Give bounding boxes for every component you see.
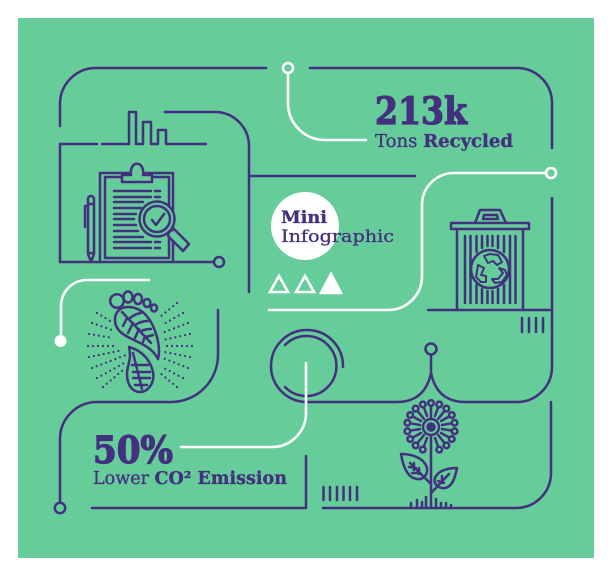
white line: 213k connector <box>283 63 366 140</box>
white line: foot connector <box>54 280 149 347</box>
icon: recycling bin <box>428 210 552 310</box>
bin lid <box>451 210 529 229</box>
stat label: Lower CO² Emission <box>93 469 287 489</box>
icon: flower <box>401 400 457 508</box>
right leaf <box>432 468 457 492</box>
white connector lines <box>54 63 556 447</box>
clipboard board <box>100 173 173 262</box>
ticks: bottom <box>324 487 357 500</box>
title: Mini Infographic <box>271 192 394 260</box>
line: top right frame <box>310 68 552 148</box>
icon: factory skyline line <box>60 112 206 262</box>
triangles <box>270 274 341 293</box>
line: left bracket with branch <box>165 112 415 292</box>
connector lines and line art <box>55 68 552 513</box>
magnifier <box>140 202 189 251</box>
floor line <box>428 309 552 311</box>
clipboard text lines <box>114 191 160 248</box>
flower head <box>405 400 457 452</box>
flower stem <box>430 435 432 508</box>
stat: 213k tons recycled <box>375 89 513 152</box>
pencil <box>85 196 94 262</box>
left leaf <box>401 454 431 484</box>
foot sole <box>115 307 159 359</box>
recycle emblem <box>471 250 509 288</box>
title word: Mini: Mini <box>281 208 327 227</box>
line: clipboard baseline with node <box>60 257 224 267</box>
toes <box>110 292 157 312</box>
bin stripes <box>465 236 516 303</box>
stat: 50% lower CO2 emission <box>93 428 287 489</box>
ticks: right <box>522 318 543 332</box>
white line: 50% connector <box>181 363 306 447</box>
line: top left frame <box>60 68 266 126</box>
white circle behind title <box>271 192 339 260</box>
line: foot section curve <box>55 310 218 513</box>
icon: circular arcs <box>271 330 343 402</box>
stat number: 50% <box>93 428 173 472</box>
stat label: Tons Recycled <box>375 132 513 152</box>
line: right side with flower node <box>306 198 552 402</box>
icon: foot leaf <box>88 292 192 392</box>
title word: Infographic: Infographic <box>281 227 394 246</box>
grass <box>411 497 451 508</box>
icon: clipboard with magnifier <box>85 164 189 262</box>
clipboard clip <box>122 164 152 182</box>
leaf veins <box>132 353 150 389</box>
line: lower left bracket <box>92 456 306 508</box>
lower leaf <box>127 347 153 392</box>
foot veins <box>122 312 153 343</box>
white line: bin connector <box>269 168 556 310</box>
dotted rays <box>88 303 192 387</box>
line: lower right frame <box>323 402 551 508</box>
bin body <box>457 229 523 310</box>
stat number: 213k <box>375 89 468 133</box>
